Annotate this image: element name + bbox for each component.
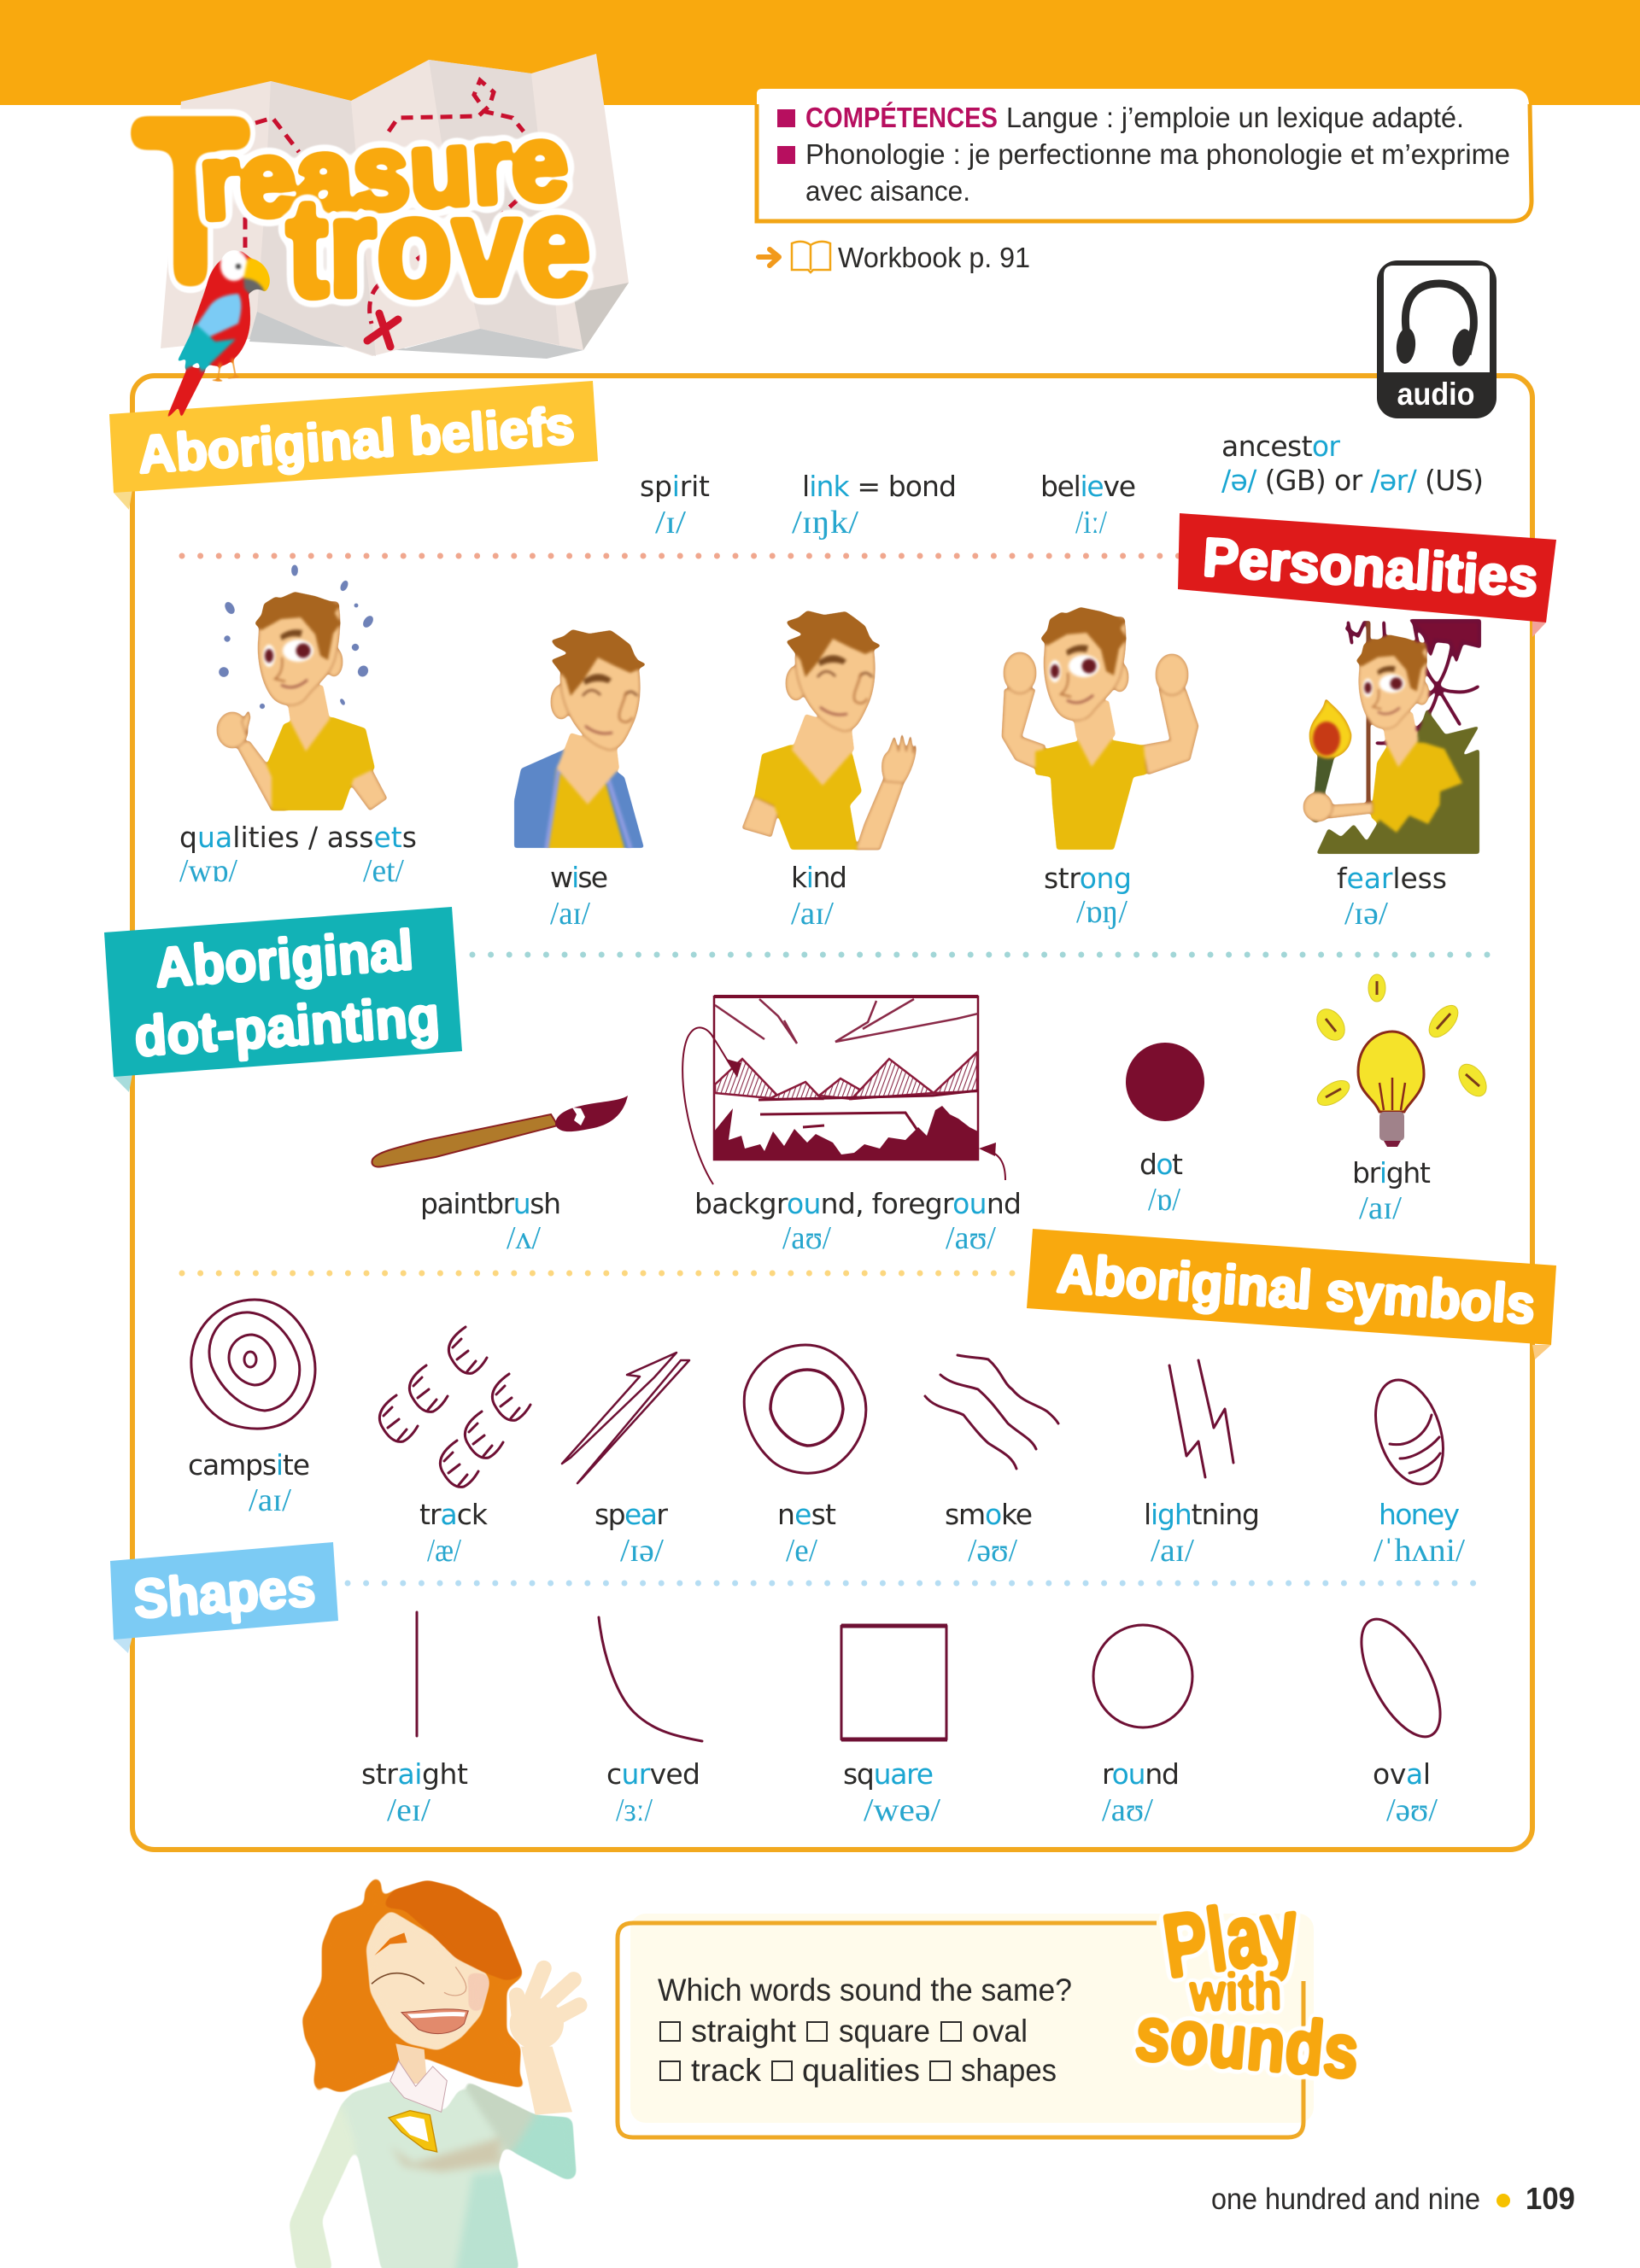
label: strong [1044,862,1132,930]
label: spear: /ɪə/ [620,1533,664,1569]
play with sounds logo: with [1188,1962,1282,2023]
word row: Aboriginal beliefs: believe [1040,470,1136,503]
panel: competences [754,89,1532,221]
label: curved: /ɜː/ [616,1792,653,1828]
workbook reference [758,242,1030,273]
label: smoke [945,1498,1033,1569]
symbol: spear [562,1353,689,1483]
illustration: paintbrush [372,1096,628,1167]
sparkles [219,564,376,709]
play with sounds logo: Play [1157,1879,1305,1997]
illustration: qualities boy [217,564,387,810]
section heading: Aboriginal beliefs [109,381,598,510]
competences text [805,102,1510,207]
word row: Aboriginal beliefs: ancestor [1221,430,1340,463]
page number: one hundred and nine [1211,2183,1480,2216]
label: paintbrush [420,1187,561,1256]
label: spear [594,1498,668,1569]
label: lightning: /aɪ/ [1151,1533,1194,1569]
label: lightning: lightning [1144,1498,1260,1531]
label: dot [1139,1148,1183,1218]
question text: straight [691,2014,797,2049]
word row: Aboriginal beliefs: /ə/ (GB) or /ər/ (US) [1221,464,1484,497]
label: honey: /ˈhʌni/ [1374,1533,1465,1569]
label: spear: spear [594,1498,668,1531]
label: square: square [843,1757,934,1791]
label: paintbrush: paintbrush [420,1187,561,1220]
word row: Aboriginal beliefs: /ɪ/ [655,505,686,541]
cream background [630,1914,1314,2123]
symbol: lightning [1169,1360,1233,1477]
shape: square [841,1626,947,1739]
label: square [843,1757,940,1828]
label: campsite: campsite [188,1448,310,1482]
label: kind: /aɪ/ [791,896,834,932]
shape: straight line [415,1612,419,1736]
label: honey: honey [1379,1498,1460,1531]
word row: Aboriginal beliefs: /ɪŋk/ [792,505,858,541]
symbol: smoke [925,1355,1058,1469]
competences text: avec aisance. [805,175,970,207]
symbol: nest [744,1345,866,1473]
label: strong: strong [1044,862,1132,895]
question text [658,1973,1072,2088]
border [618,1923,1303,2137]
label: straight [361,1757,468,1828]
label: nest: /e/ [786,1533,817,1569]
label: square: /weə/ [864,1792,940,1828]
label: dot: /ɒ/ [1148,1182,1180,1218]
label: curved: curved [606,1757,700,1791]
label: nest [777,1498,836,1569]
label: wise: /aɪ/ [550,896,590,932]
bangs [382,1880,524,1981]
illustration: fearless boy in the jungle [1303,621,1479,854]
label: kind [791,861,847,932]
label: track [419,1498,489,1569]
word row: Aboriginal beliefs: link = bond [802,470,957,503]
symbol: track [379,1327,530,1487]
brow, eye, nose, mouth [374,1932,407,1955]
label: oval [1373,1757,1438,1828]
workbook reference: Workbook p. 91 [838,242,1030,273]
label: track: /æ/ [427,1533,461,1569]
question text: qualities [802,2053,920,2088]
label: bright: /aɪ/ [1359,1190,1402,1226]
label: dot: dot [1139,1148,1183,1181]
label: strong: /ɒŋ/ [1076,894,1128,930]
label: straight: straight [361,1757,468,1791]
word row: Aboriginal beliefs [640,430,1484,541]
label: paintbrush: /ʌ/ [507,1220,541,1256]
page number: 109 [1526,2181,1575,2216]
icon: parrot [166,250,270,420]
section heading: Aboriginal symbols: Aboriginal symbols [1055,1242,1538,1336]
label: oval: oval [1373,1757,1431,1791]
label: background, foreground: /aʊ/ [782,1220,831,1256]
panel: play with sounds [618,1879,1362,2137]
label: fearless [1337,862,1447,932]
icon: book [792,242,830,272]
section heading: Aboriginal dot-painting: dot-painting [132,984,442,1068]
collar [390,2060,447,2112]
face [366,1910,489,2051]
treasure map [161,54,629,359]
label: round: /aʊ/ [1102,1792,1153,1828]
label: qualities / assets: /wɒ/ [179,853,237,889]
label: bright: bright [1352,1156,1431,1190]
label: fearless: /ɪə/ [1344,896,1388,932]
neck [395,2043,427,2084]
pointer: background [682,1027,737,1184]
mountains [715,1052,977,1099]
word row: Aboriginal beliefs: spirit [640,470,710,503]
title text [132,69,591,333]
label: wise [550,861,608,932]
shape: oval [1345,1607,1456,1749]
illustration: strong boy [1002,607,1198,850]
illustration: kind boy [742,611,916,850]
illustration: landscape background and foreground [682,997,1005,1184]
label: honey [1374,1498,1465,1569]
bullet squares [777,109,795,164]
torch [1312,751,1336,823]
title text: trove [286,167,591,326]
icon: light bulb [1311,974,1492,1147]
question text: shapes [961,2053,1057,2088]
label: qualities / assets: qualities / assets [179,821,417,854]
foreground [714,1106,978,1160]
section heading: Aboriginal symbols [1027,1229,1556,1359]
title text: T [132,69,249,333]
question text: square [839,2014,930,2049]
hair back [302,1876,527,2105]
question text: oval [972,2014,1028,2049]
badge [389,2111,437,2152]
label: background, foreground: /aʊ/ [946,1220,996,1256]
illustration: dot [1126,1043,1204,1121]
label: background, foreground [694,1187,1022,1256]
play with sounds logo [1132,1879,1362,2096]
section heading: Aboriginal dot-painting [104,907,462,1092]
label: campsite: /aɪ/ [249,1482,291,1518]
section heading: Shapes [110,1542,338,1653]
competences text: COMPÉTENCES [805,102,998,133]
sweater [289,2078,577,2268]
pointer: foreground [982,1149,1005,1180]
section heading: Aboriginal dot-painting: Aboriginal [153,918,415,999]
shape: round [1093,1625,1192,1727]
label: kind: kind [791,861,847,894]
section heading: Shapes: Shapes [132,1556,317,1630]
title block: treasure map with Treasure trove [132,54,629,359]
word row: Aboriginal beliefs: /iː/ [1075,505,1107,541]
vines [1345,621,1479,743]
top orange bar [0,0,1640,105]
label: fearless: fearless [1337,862,1447,895]
section heading: Aboriginal beliefs: Aboriginal beliefs [136,396,577,485]
label: qualities / assets: /et/ [363,853,404,889]
dotted dividers [182,556,1491,1583]
label: bright [1352,1156,1431,1226]
label: nest: nest [777,1498,836,1531]
title text: reasure [196,102,571,243]
question text: Which words sound the same? [658,1973,1072,2008]
arm and hand [521,2047,572,2115]
clouds [715,999,978,1043]
label: background, foreground: background, foreground [694,1187,1022,1220]
play with sounds logo: sounds [1132,1990,1362,2096]
question text: track [691,2053,762,2088]
icon: audio: audio [1397,377,1474,412]
competences text: Phonologie : je perfectionne ma phonologie et m’exprime [805,138,1510,170]
label: oval: /əʊ/ [1386,1792,1438,1828]
competences text: Langue : j’emploie un lexique adapté. [1006,102,1464,133]
label: round: round [1102,1757,1180,1791]
symbol: honey [1363,1371,1456,1493]
label: lightning [1144,1498,1260,1569]
section heading: Personalities: Personalities [1201,526,1540,609]
label: straight: /eɪ/ [387,1792,430,1828]
label: wise: wise [550,861,608,894]
label: qualities / assets [179,821,417,889]
label: smoke: smoke [945,1498,1033,1531]
illustration: wise boy [514,629,647,848]
label: smoke: /əʊ/ [968,1533,1017,1569]
shape: curved line [599,1617,702,1741]
section heading: Personalities [1178,513,1556,637]
label: curved [606,1757,700,1828]
icon: audio [1377,260,1496,418]
foliage back [1409,709,1479,854]
label: track: track [419,1498,489,1531]
illustration: laughing girl [289,1876,579,2268]
panel: vocabulary frame [132,376,1532,1850]
label: round [1102,1757,1180,1828]
icon: arrow [758,249,779,266]
symbol: campsite [191,1300,315,1429]
label: campsite [188,1448,310,1518]
